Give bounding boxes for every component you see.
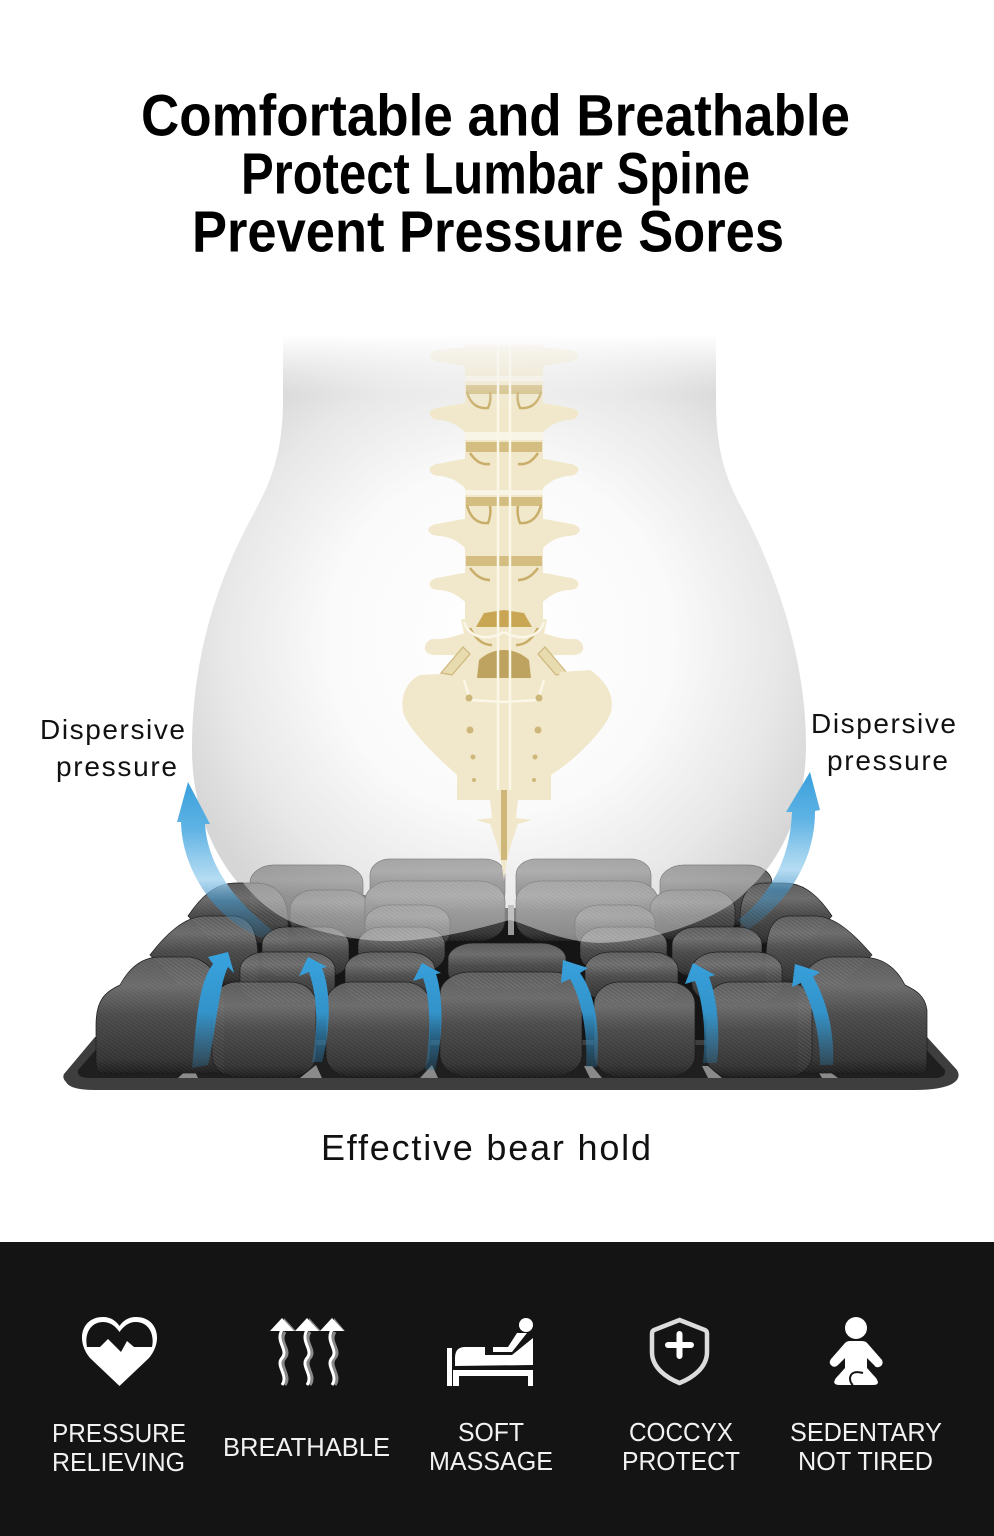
label: right dispersive pressure: Dispersive [811, 708, 956, 739]
cushion base mat [63, 1037, 959, 1090]
arrow: right dispersive pressure [738, 772, 820, 930]
panel: feature band [0, 1242, 994, 1536]
translucent body overlap on cushion [200, 800, 800, 943]
title: Prevent Pressure Sores [192, 200, 784, 264]
label: effective bear hold: Effective bear hold [321, 1127, 651, 1168]
icon: shield [652, 1320, 707, 1383]
title [141, 84, 850, 264]
feature: pressure relieving [52, 1420, 186, 1477]
feature: soft massage: SOFT [458, 1419, 524, 1447]
feature: coccyx protect [622, 1419, 740, 1476]
body silhouette [192, 330, 806, 943]
feature: soft massage: MASSAGE [429, 1448, 553, 1476]
arrow: left dispersive pressure [177, 782, 272, 938]
spine illustration [402, 345, 612, 880]
arrows: cushion airflow [192, 952, 833, 1070]
feature: coccyx protect: COCCYX [629, 1419, 733, 1447]
label: left dispersive pressure: pressure [56, 751, 177, 782]
label: left dispersive pressure: Dispersive [40, 714, 185, 745]
air cushion [63, 859, 959, 1090]
feature: pressure relieving: RELIEVING [52, 1449, 185, 1477]
title: Comfortable and Breathable [141, 84, 850, 148]
title: Protect Lumbar Spine [241, 142, 750, 206]
feature: soft massage [429, 1419, 553, 1476]
icon: bed [447, 1318, 533, 1386]
feature: coccyx protect: PROTECT [622, 1448, 740, 1476]
label: right dispersive pressure [811, 708, 956, 776]
feature: breathable: BREATHABLE [223, 1434, 390, 1462]
label: right dispersive pressure: pressure [827, 745, 948, 776]
feature: sedentary not tired: SEDENTARY [790, 1419, 942, 1447]
feature: sedentary not tired: NOT TIRED [798, 1448, 933, 1476]
cushion cells [96, 859, 927, 1077]
feature: sedentary not tired [790, 1419, 942, 1476]
icon: breathable arrows [270, 1318, 345, 1385]
icon: seated person [830, 1317, 883, 1385]
feature: pressure relieving: PRESSURE [52, 1420, 186, 1448]
label: left dispersive pressure [40, 714, 185, 782]
icon: heart [82, 1317, 157, 1386]
